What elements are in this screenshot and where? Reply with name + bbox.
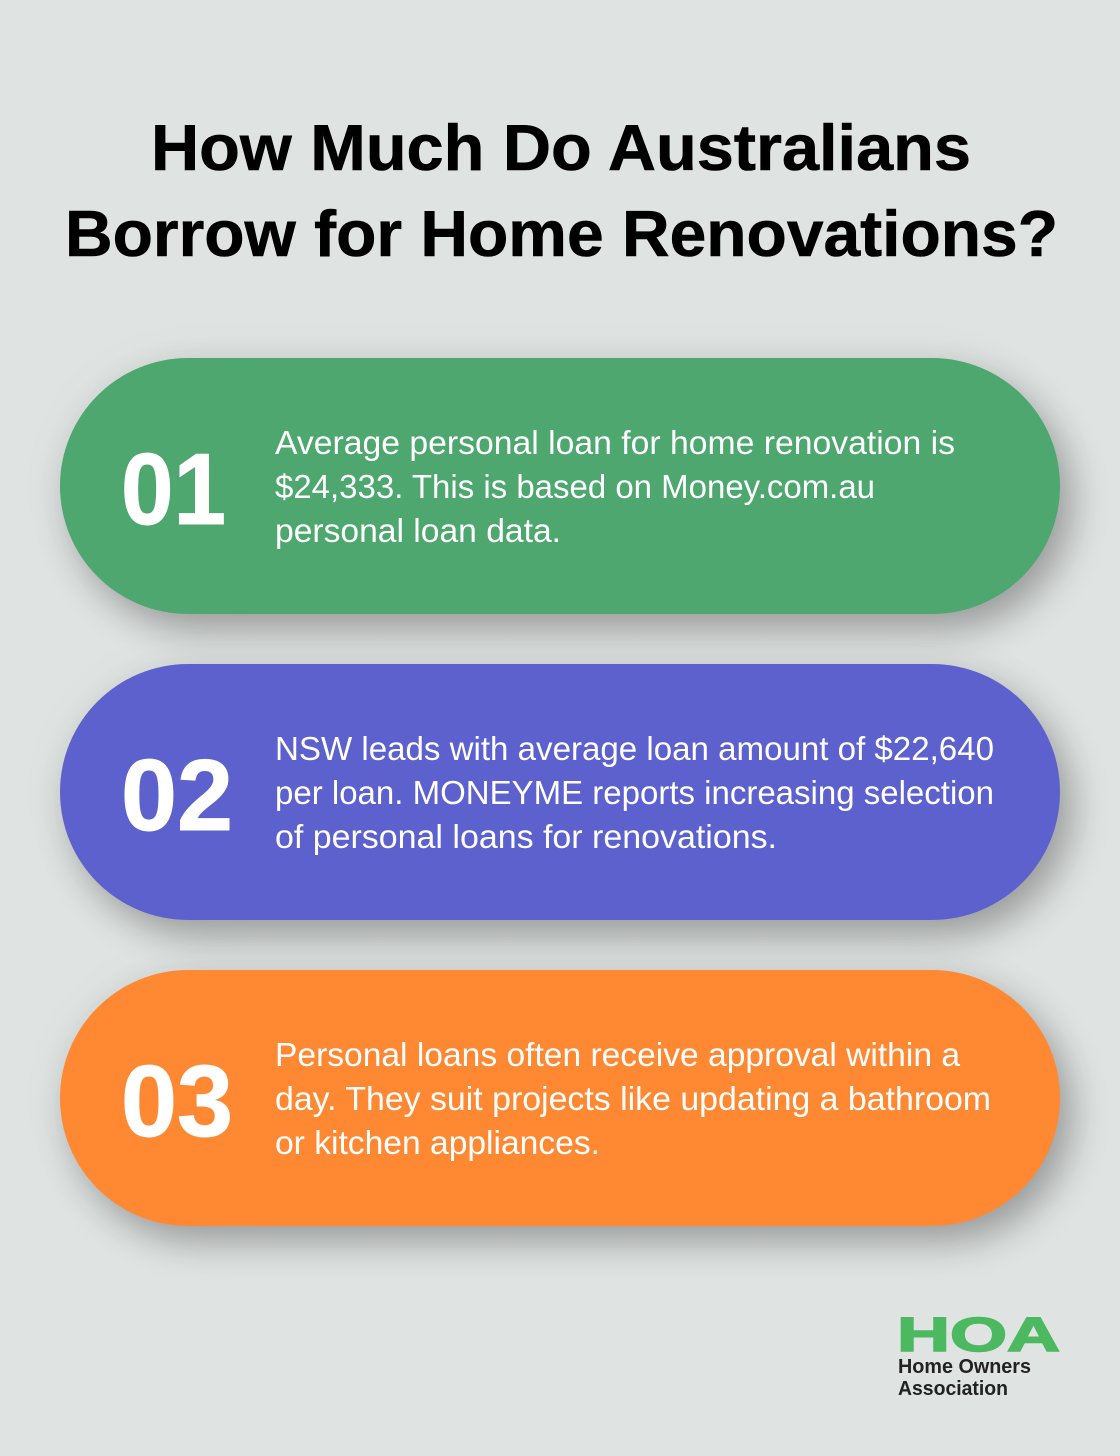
logo mark: HOA: HOA	[897, 1309, 1060, 1362]
text: card 01 body: personal loan data.	[275, 512, 561, 549]
text: card 02 body: per loan. MONEYME reports increasing selection	[275, 774, 994, 811]
number 02: 02	[121, 740, 233, 852]
number 03: 03	[121, 1046, 233, 1158]
panel: card 01	[60, 358, 1060, 614]
logo text	[898, 1356, 1031, 1400]
text: card 03 body: day. They suit projects like updating a bathroom	[275, 1080, 991, 1117]
panel: card 03	[60, 970, 1060, 1226]
text: card 02 body: NSW leads with average loan amount of $22,640	[275, 730, 994, 767]
logo text: Home Owners	[898, 1356, 1031, 1378]
text: card 03 body: Personal loans often receive approval within a	[275, 1036, 961, 1073]
logo text: Association	[898, 1378, 1008, 1400]
text: card 02 body	[275, 730, 994, 855]
text: card 01 body: Average personal loan for home renovation is	[275, 424, 955, 461]
text: card 01 body: $24,333. This is based on Money.com.au	[275, 468, 875, 505]
text: card 01 body	[275, 424, 955, 549]
logo: Home Owners Association	[897, 1309, 1060, 1400]
text: card 03 body: or kitchen appliances.	[275, 1124, 600, 1161]
panel: card 02	[60, 664, 1060, 920]
text: card 02 body: of personal loans for renovations.	[275, 818, 777, 855]
title: How Much Do Australians	[151, 111, 971, 184]
text: card 03 body	[275, 1036, 991, 1161]
title: Borrow for Home Renovations?	[65, 197, 1058, 270]
title	[65, 111, 1058, 270]
number 01: 01	[121, 434, 226, 546]
